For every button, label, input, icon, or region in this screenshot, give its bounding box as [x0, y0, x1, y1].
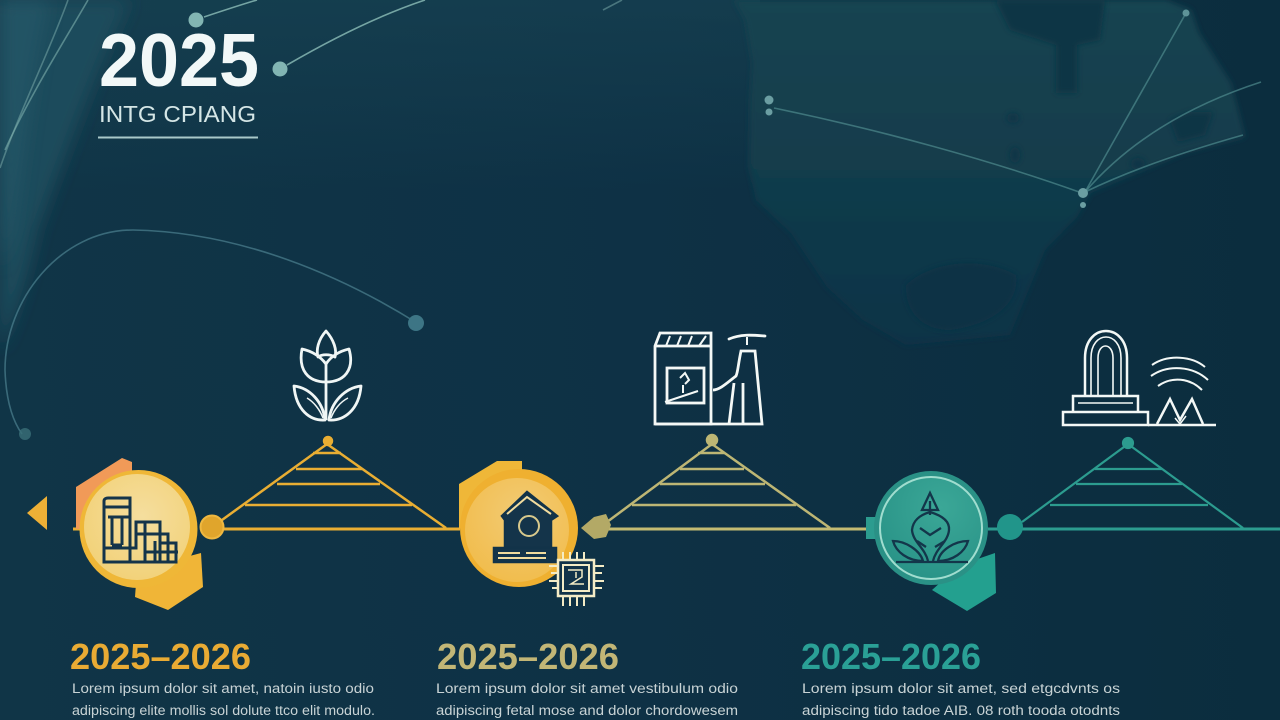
icon: microchip: [549, 552, 604, 606]
left arrow: [27, 496, 47, 530]
column 3 text: [801, 636, 1120, 718]
icon: city buildings: [104, 498, 178, 562]
connector node olive: [581, 514, 611, 539]
title underline: [98, 136, 258, 138]
icon: leaf tree: [893, 493, 968, 562]
pyramid olive: [607, 435, 830, 528]
subtitle: INTG CPIANG: [99, 101, 256, 127]
column 1 text: [70, 636, 375, 718]
title block: 2025: [99, 18, 259, 102]
olive timeline base: [606, 528, 870, 530]
connector node teal: [997, 514, 1023, 540]
column 2 description: adipiscing fetal mose and dolor chordowesem: [436, 703, 738, 718]
column 1 description: Lorem ipsum dolor sit amet, natoin iusto odio: [72, 681, 374, 696]
column 1 description: adipiscing elite mollis sol dolute ttco elit modulo.: [72, 703, 375, 718]
icon: factory with chimney: [655, 333, 765, 424]
column 2 text: [436, 636, 738, 718]
column 2 date: 2025–2026: [437, 636, 619, 677]
column 3 description: adipiscing tido tadoe AIB. 08 roth tooda otodnts: [802, 703, 1120, 718]
column 3 date: 2025–2026: [801, 636, 981, 677]
pyramid amber: [222, 437, 446, 528]
icon: house: [494, 492, 557, 562]
connector node amber: [200, 516, 224, 538]
icon: arch monument and wifi: [1063, 331, 1216, 425]
badge gold: [459, 461, 578, 587]
column 3 description: Lorem ipsum dolor sit amet, sed etgcdvnts os: [802, 681, 1120, 696]
timeline stage 1: [27, 437, 460, 610]
column 1 date: 2025–2026: [70, 636, 251, 677]
connector lines and nodes: [0, 0, 1261, 440]
olive link: [830, 528, 870, 530]
badge teal: [866, 471, 996, 611]
timeline stage 2: [459, 435, 870, 606]
timeline stage 3: [830, 438, 1280, 611]
title block: [98, 18, 259, 138]
column 2 description: Lorem ipsum dolor sit amet vestibulum odio: [436, 681, 738, 696]
teal timeline base: [988, 528, 1280, 530]
pyramid teal: [1022, 438, 1243, 528]
icon: tulip plant: [294, 331, 361, 420]
amber timeline base: [73, 528, 460, 530]
badge amber: [76, 458, 203, 610]
